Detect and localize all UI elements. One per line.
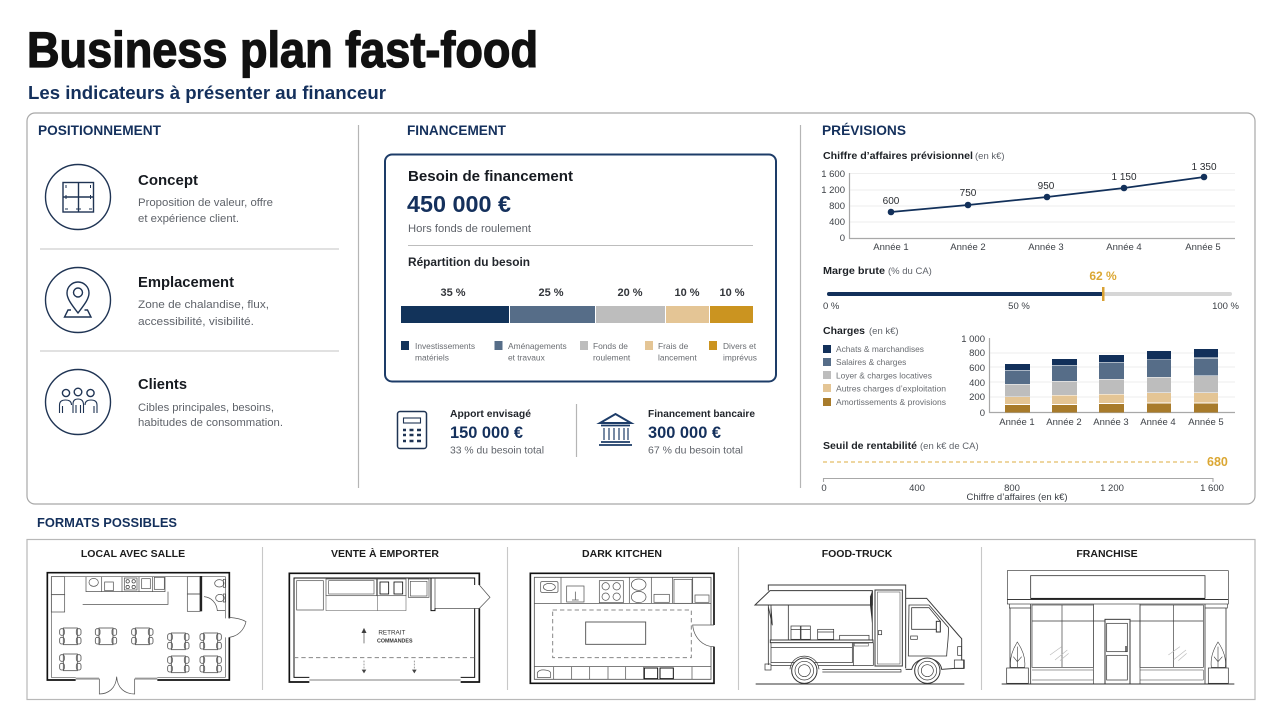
text: apport envisagé [450, 408, 544, 456]
line chart: chiffre d'affaires: 800 [829, 201, 845, 212]
text: apport envisagé: 33 % du besoin total [450, 444, 544, 456]
chart: seuil de rentabilité: 800 [1004, 483, 1020, 494]
stacked bar chart: charges: 0 [980, 408, 985, 419]
heading: prévisions: PRÉVISIONS [822, 123, 906, 138]
legend: répartition: et travaux [508, 352, 546, 362]
text: clients: habitudes de consommation. [138, 417, 283, 429]
heading: positionnement: POSITIONNEMENT [38, 123, 162, 138]
legend: répartition: lancement [658, 352, 697, 362]
gauge: marge brute: (% du CA) [888, 266, 932, 277]
panel: formats [27, 540, 1255, 700]
chart: seuil de rentabilité: Seuil de rentabilité [823, 440, 917, 452]
gauge: marge brute: 0 % [823, 301, 840, 312]
floor plan: vente: RETRAIT [378, 629, 406, 636]
chart: seuil de rentabilité: 1 600 [1200, 483, 1224, 494]
format: food-truck [755, 548, 964, 684]
line chart: chiffre d'affaires: 1 350 [1191, 162, 1217, 173]
text: concept: Concept [138, 173, 198, 189]
legend: répartition [401, 341, 757, 362]
chart: seuil de rentabilité: 0 [821, 483, 827, 494]
stacked bar chart: charges: 800 [969, 348, 985, 359]
format: vente à emporter [289, 547, 490, 682]
icon: bank [599, 414, 632, 445]
line chart: chiffre d'affaires: 1 200 [821, 185, 845, 196]
stacked bar: répartition: 10 % [674, 287, 700, 299]
line chart: chiffre d'affaires: 1 150 [1111, 172, 1137, 183]
heading: formats possibles: FORMATS POSSIBLES [37, 516, 177, 530]
subtitle: Les indicateurs à présenter au financeur [28, 82, 386, 103]
legend: répartition: Fonds de [593, 341, 628, 351]
gauge: marge brute: 50 % [1008, 301, 1030, 312]
legend: répartition: Aménagements [508, 341, 567, 351]
floor plan: vente [289, 573, 490, 682]
legend: charges: Loyer & charges locatives [836, 370, 932, 380]
text: financement bancaire: Financement bancaire [648, 408, 755, 420]
floor plan: dark kitchen [530, 573, 714, 683]
stacked bar: répartition: 35 % [440, 287, 466, 299]
text: emplacement [138, 275, 269, 328]
format: local avec salle: LOCAL AVEC SALLE [81, 548, 185, 560]
illustration: food-truck [755, 585, 964, 684]
gauge: marge brute [823, 265, 1240, 312]
stacked bar: répartition: 25 % [538, 287, 564, 299]
chart: seuil de rentabilité [821, 440, 1228, 503]
format: vente à emporter: VENTE À EMPORTER [331, 547, 439, 560]
stacked bar chart: charges: Année 3 [1093, 417, 1129, 428]
stacked bar chart: charges: Année 2 [1046, 417, 1082, 428]
icon: concept grid [46, 164, 110, 230]
text: clients: Cibles principales, besoins, [138, 402, 274, 414]
legend: charges: Autres charges d’exploitation [836, 384, 946, 394]
legend: charges: Amortissements & provisions [836, 397, 946, 407]
line chart: chiffre d'affaires: 750 [960, 188, 977, 199]
line chart: chiffre d'affaires: Année 1 [873, 242, 909, 253]
illustration: franchise [1002, 571, 1234, 684]
chart: seuil de rentabilité: 680 [1207, 455, 1228, 469]
panel: positionnement [38, 123, 339, 434]
gauge: marge brute: Marge brute [823, 265, 885, 277]
line chart: chiffre d'affaires: Année 2 [950, 242, 986, 253]
stacked bar chart: charges: (en k€) [869, 326, 899, 337]
chart: seuil de rentabilité: Chiffre d’affaires (en k€) [966, 492, 1068, 503]
legend: charges: Achats & marchandises [836, 344, 924, 354]
text: financement bancaire: 300 000 € [648, 424, 721, 442]
text: clients: Clients [138, 377, 187, 393]
card: besoin de financement [385, 154, 776, 382]
line chart: chiffre d'affaires: 0 [840, 233, 845, 244]
stacked bar chart: charges [823, 325, 1235, 428]
card: besoin de financement: Hors fonds de roulement [408, 223, 531, 235]
line chart: chiffre d'affaires: Année 3 [1028, 242, 1064, 253]
stacked bar: répartition: 20 % [617, 287, 643, 299]
main panel frame [27, 113, 1255, 504]
text: concept [138, 173, 273, 225]
line chart: chiffre d'affaires: 1 600 [821, 169, 845, 180]
icon: calculator [398, 412, 426, 448]
gauge: marge brute: 62 % [1089, 269, 1117, 283]
legend: charges: Salaires & charges [836, 357, 906, 367]
format: dark kitchen [530, 548, 714, 683]
text: clients [138, 377, 283, 429]
card: besoin de financement: Répartition du besoin [408, 255, 530, 269]
line chart: chiffre d'affaires: 400 [829, 217, 845, 228]
stacked bar chart: charges: 1 000 [961, 334, 985, 345]
text: emplacement: Emplacement [138, 275, 234, 291]
stacked bar: répartition [401, 287, 753, 323]
text: concept: Proposition de valeur, offre [138, 197, 273, 209]
line chart: chiffre d'affaires: Année 4 [1106, 242, 1142, 253]
stacked bar chart: charges: Année 4 [1140, 417, 1176, 428]
line chart: chiffre d'affaires: (en k€) [975, 151, 1005, 162]
format: dark kitchen: DARK KITCHEN [582, 548, 662, 560]
heading: financement: FINANCEMENT [407, 123, 507, 138]
line chart: chiffre d'affaires: 950 [1038, 181, 1055, 192]
legend: charges [823, 344, 946, 407]
icon: location pin [46, 268, 110, 332]
panel: prévisions [821, 123, 1240, 503]
chart: seuil de rentabilité: 400 [909, 483, 925, 494]
text: apport envisagé: 150 000 € [450, 424, 523, 442]
line chart: chiffre d'affaires: Année 5 [1185, 242, 1221, 253]
text: emplacement: Zone de chalandise, flux, [138, 299, 269, 311]
floor plan: local [47, 573, 246, 694]
icon: clients group [46, 370, 110, 434]
format: franchise [1002, 548, 1234, 684]
stacked bar chart: charges: 400 [969, 378, 985, 389]
stacked bar chart: charges: Année 1 [999, 417, 1035, 428]
stacked bar chart: charges: Charges [823, 325, 865, 337]
stacked bar: répartition: 10 % [719, 287, 745, 299]
stacked bar chart: charges: Année 5 [1188, 417, 1224, 428]
format: food-truck: FOOD-TRUCK [822, 548, 893, 560]
legend: répartition: Investissements [415, 341, 475, 351]
legend: répartition: Divers et [723, 341, 757, 351]
panel: financement [385, 123, 776, 457]
stacked bar chart: charges: 200 [969, 392, 985, 403]
legend: répartition: roulement [593, 352, 631, 362]
stacked bar chart: charges: 600 [969, 363, 985, 374]
text: financement bancaire: 67 % du besoin total [648, 444, 743, 456]
title: Business plan fast-food [27, 22, 538, 78]
text: apport envisagé: Apport envisagé [450, 408, 531, 420]
floor plan: vente: COMMANDES [377, 639, 413, 645]
text: financement bancaire [648, 408, 755, 456]
chart: seuil de rentabilité: (en k€ de CA) [920, 441, 979, 452]
legend: répartition: imprévus [723, 352, 757, 362]
card: besoin de financement: 450 000 € [407, 191, 511, 217]
legend: répartition: matériels [415, 352, 449, 362]
gauge: marge brute: 100 % [1212, 301, 1240, 312]
chart: seuil de rentabilité: 1 200 [1100, 483, 1124, 494]
line chart: chiffre d'affaires: Chiffre d’affaires prévisionnel [823, 150, 973, 162]
text: concept: et expérience client. [138, 213, 239, 225]
tables [60, 628, 221, 673]
card: besoin de financement: Besoin de financement [408, 168, 573, 185]
text: emplacement: accessibilité, visibilité. [138, 316, 254, 328]
format: local avec salle [47, 548, 246, 694]
line chart: chiffre d'affaires: 600 [883, 196, 900, 207]
format: franchise: FRANCHISE [1076, 548, 1138, 560]
line chart: chiffre d'affaires [821, 150, 1235, 253]
legend: répartition: Frais de [658, 341, 689, 351]
